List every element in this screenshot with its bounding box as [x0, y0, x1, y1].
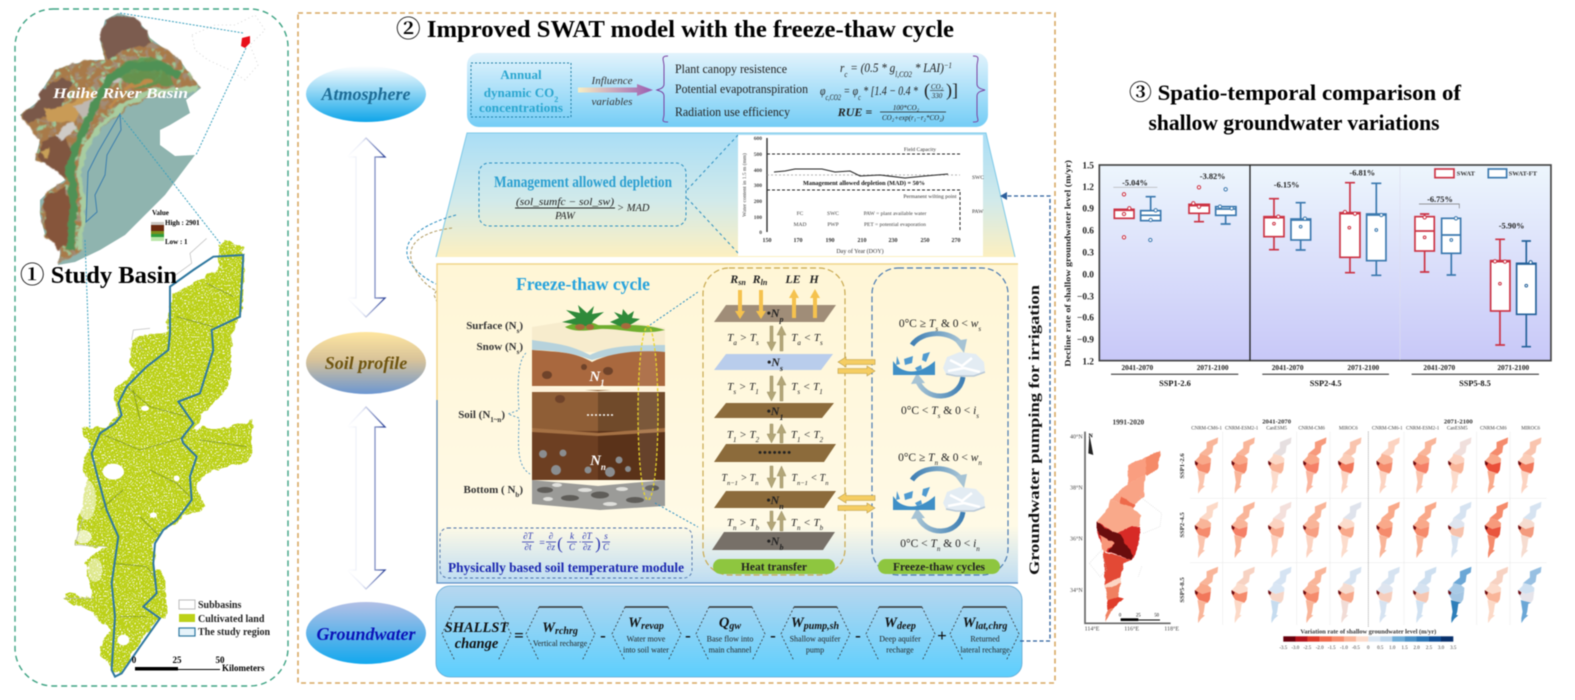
legend: elevation value: Value: [152, 209, 169, 217]
map: China inset: [192, 15, 265, 80]
header: periods and models: CNRM-CM6-1: [1191, 426, 1223, 431]
hexagon: W lateral: [950, 607, 1019, 661]
axis: periods and scenarios: 2041-2070: [1121, 363, 1154, 372]
diagram: soil column: Nn: [589, 453, 606, 472]
legend: colour bar: [1279, 628, 1457, 651]
box: annual dynamic CO2: concentrations: [479, 100, 563, 115]
legend: colour bar: 0: [1367, 646, 1370, 651]
layer: snow node: •Ns: [767, 355, 783, 372]
hexagon: W revap: into soil water: [623, 646, 669, 654]
box: MAD formula: (sol_sumfc − sol_sw): [516, 197, 615, 208]
chart: decline rate box plots: [1063, 160, 1551, 388]
axis: periods and scenarios: [1111, 363, 1539, 388]
panel: spatio-temporal comparison: [1063, 80, 1551, 651]
hexagon: Q gw: Qgw: [719, 615, 741, 632]
layer: soil node n: •Nn: [766, 493, 784, 510]
axis: periods and scenarios: SSP1-2.6: [1159, 379, 1191, 388]
scale bar: 50: [216, 655, 225, 665]
node: Atmosphere: [306, 66, 426, 122]
brace: right: [973, 56, 985, 122]
axis: periods and scenarios: SSP2-4.5: [1310, 379, 1341, 388]
layer: snow node: [714, 354, 833, 372]
legend: elevation value: High : 2901: [165, 219, 200, 227]
panel: management allowed depletion: [436, 133, 1015, 257]
arrows and temperature relations: Ts < T1: [791, 381, 823, 396]
chart: soil water depletion: Permanent wilting point: [903, 194, 957, 200]
chart: soil water depletion: PET = potential evaporation: [864, 222, 926, 228]
chart: soil water depletion: Field Capacity: [904, 147, 936, 153]
legend: colour bar: 1.0: [1389, 646, 1396, 651]
hexagon: Q gw: main channel: [709, 646, 752, 654]
labels: percent change: -5.90%: [1499, 222, 1524, 231]
formula: heat equation: ∂t: [525, 542, 532, 552]
layer: bottom node: •Nb: [767, 534, 783, 552]
arrow: influence variables: [578, 75, 653, 108]
axis: periods and scenarios: 2071-2100: [1497, 363, 1529, 372]
formula: heat equation: [522, 531, 610, 553]
legend: colour bar: 1.5: [1402, 646, 1408, 651]
heading: spatio-temporal comparison: ③ Spatio-temporal comparison of: [1129, 80, 1462, 105]
formula: heat equation: ∂T: [582, 531, 593, 541]
text: influence variables list: Plant canopy resistence: [675, 61, 787, 76]
charts: decline rate maps: [1070, 418, 1547, 651]
boxes: SSP5-8.5: [1415, 214, 1536, 347]
labels: scenarios: [1179, 453, 1186, 603]
chart: soil water depletion: PAW = plant available water: [864, 211, 927, 217]
hexagon: W pump sh: Shallow aquifer: [790, 634, 841, 644]
hexagon: W lateral: Wlat,chrg: [963, 615, 1007, 632]
panel: freeze-thaw cycles: [872, 268, 1008, 575]
arrow: groundwater pumping for irrigation: [1000, 192, 1050, 641]
formula: canopy resistance: rc = (0.5 * gl,CO2 * LAI)−1: [840, 60, 952, 78]
chart: soil water depletion: 230: [888, 238, 898, 244]
box: annual dynamic CO2: Annual: [500, 67, 542, 82]
map: 1991-2020 decline rate: 40°N: [1070, 434, 1083, 441]
hexagon: W lateral: lateral recharge: [960, 646, 1010, 654]
arrow: influence variables: Influence: [591, 75, 633, 87]
node: Soil profile: Soil profile: [325, 353, 407, 373]
diagram: soil column: N1: [588, 369, 605, 388]
label: Heat transfer: Heat transfer: [741, 562, 807, 574]
heading: spatio-temporal comparison: [1129, 80, 1462, 135]
labels: scenarios: SSP1-2.6: [1179, 453, 1186, 479]
chart: soil water depletion: 200: [754, 199, 762, 205]
hexagon: W deep: [866, 607, 935, 661]
arrows and temperature relations: Tn−1 > Tn: [721, 473, 759, 486]
boxes: SSP1-2.6: [1114, 186, 1236, 242]
layer: soil node 1: •N1: [767, 404, 783, 422]
labels: soil layers: Snow (Ns): [477, 341, 523, 356]
arrows: exchange between heat transfer and cycles (snow): [838, 357, 875, 376]
labels: soil layers: Bottom ( Nb): [463, 484, 523, 499]
hexagon: Q gw: Base flow into: [707, 634, 753, 644]
map: study region cultivated land: [63, 238, 253, 677]
box: annual dynamic CO2: [471, 63, 571, 117]
panel: study basin: [15, 9, 288, 686]
boxes: SSP2-4.5: [1264, 183, 1386, 275]
map: 1991-2020 decline rate: 1991-2020: [1112, 418, 1145, 427]
labels: percent change: -5.04%: [1122, 178, 1148, 187]
map: 1991-2020 decline rate: N: [1088, 433, 1093, 439]
hexagon: W rchrg: [526, 607, 595, 661]
formula: radiation use efficiency: RUE =: [837, 105, 872, 119]
chart: soil water depletion: FC: [797, 211, 804, 217]
box: soil temperature module: Physically based soil temperature module: [448, 561, 684, 576]
chart: soil water depletion: 210: [858, 238, 866, 244]
chart: soil water depletion: [738, 135, 984, 256]
header: periods and models: CNRM-CM6: [1298, 426, 1325, 431]
node: Groundwater: [306, 602, 426, 664]
header: periods and models: 2071-2100: [1444, 418, 1473, 425]
heading: Study Basin: ① Study Basin: [20, 262, 177, 289]
text: snow thaw condition: 0°C < Ts & 0 < is: [901, 405, 979, 420]
legend: SWAT and SWAT-FT: SWAT: [1457, 170, 1476, 177]
chart: soil water depletion: MAD: [794, 222, 806, 228]
map: 1991-2020 decline rate: 118°E: [1164, 626, 1179, 633]
axis: y ticks: 1.5: [1082, 161, 1094, 171]
label: Freeze-thaw cycles: [878, 559, 1000, 574]
legend: land categories: The study region: [198, 627, 270, 638]
label: Freeze-thaw cycles: Freeze-thaw cycles: [893, 562, 986, 574]
panel: heat transfer: [703, 268, 845, 575]
icon: soil water and ice cycle: [893, 469, 985, 531]
arrow: atmosphere to soil: [347, 138, 385, 317]
arrows and temperature relations: T1 > T2: [727, 429, 760, 444]
formula: heat equation: C: [603, 542, 610, 552]
diagram: soil column: [532, 305, 665, 510]
axis: y ticks: −0.6: [1077, 314, 1094, 324]
arrows: surface fluxes: [735, 289, 820, 319]
scale bar: 25: [172, 655, 182, 665]
arrow: influence variables: variables: [592, 96, 632, 108]
arrows and temperature relations: Tn > Tb: [727, 517, 760, 532]
arrows and temperature relations: Ta > Ts: [727, 332, 759, 347]
text: influence variables list: [675, 61, 808, 119]
map: 1991-2020 decline rate: 0: [1119, 614, 1122, 619]
formula: heat equation: ): [595, 534, 601, 553]
hexagon: W pump sh: [781, 607, 850, 661]
scale bar: 0: [132, 655, 137, 665]
chart: soil water depletion: Day of Year (DOY): [836, 248, 884, 255]
labels: surface fluxes: H: [808, 272, 819, 286]
chart: soil water depletion: 100: [754, 215, 762, 221]
axis: y ticks: 1.2: [1082, 357, 1094, 367]
formula: potential evapotranspiration: CO₂: [931, 83, 944, 91]
labels: surface fluxes: Rsn: [729, 272, 746, 287]
header: periods and models: CNRM-CM6: [1480, 426, 1507, 431]
map: 1991-2020 decline rate: 114°E: [1085, 626, 1100, 633]
labels: soil layers: [458, 320, 530, 499]
legend: SWAT and SWAT-FT: [1435, 169, 1538, 178]
box: soil temperature module: [440, 528, 692, 578]
formula: heat equation: ∂z: [547, 542, 555, 552]
scale bar: Kilometers: [222, 663, 265, 673]
arrows and temperature relations: Tn−1 < Tn: [791, 473, 829, 486]
icon: snow water and ice cycle: [893, 334, 985, 396]
small maps: SSP2-4.5: [1195, 502, 1541, 558]
hexagon: W deep: Wdeep: [884, 615, 916, 632]
arrow: soil to groundwater: [347, 407, 385, 589]
legend: SWAT and SWAT-FT: SWAT-FT: [1509, 170, 1538, 177]
node: Atmosphere: Atmosphere: [320, 84, 411, 104]
formula: potential evapotranspiration: 330: [931, 92, 943, 100]
box: MAD formula: PAW: [554, 211, 576, 222]
formula: heat equation: C: [569, 542, 576, 552]
formula: potential evapotranspiration: )]: [946, 80, 958, 101]
labels: scenarios: SSP5-8.5: [1179, 577, 1186, 603]
panel: groundwater balance: [436, 586, 1022, 677]
heading: improved SWAT model: ② Improved SWAT model with the freeze-thaw cycle: [396, 16, 954, 43]
text: influence variables list: Potential evapotranspiration: [675, 81, 808, 96]
hexagon: W pump sh: Wpump,sh: [791, 615, 840, 632]
hexagon: W rchrg: Wrchrg: [542, 620, 578, 637]
labels: percent change: -6.75%: [1427, 195, 1453, 204]
box: MAD formula: > MAD: [617, 203, 650, 214]
labels: percent change: [1113, 168, 1524, 231]
axis: y ticks: 0.6: [1082, 226, 1094, 236]
hexagon: W revap: Wrevap: [628, 615, 664, 632]
hexagon: SHALLST change: [442, 607, 511, 661]
box: MAD formula: [479, 163, 686, 226]
axis: y ticks: 0.3: [1082, 248, 1094, 258]
arrow: groundwater pumping for irrigation: Groundwater pumping for irrigation: [1027, 285, 1043, 575]
operators: -: [600, 626, 606, 645]
axis: periods and scenarios: 2041-2070: [1272, 363, 1304, 372]
operators: -: [855, 626, 861, 645]
legend: colour bar: 0.5: [1377, 646, 1384, 651]
hexagon: SHALLST change: SHALLST: [445, 620, 509, 636]
formula: heat equation: ∂: [549, 531, 553, 541]
node: Groundwater: Groundwater: [316, 624, 417, 644]
chart: soil water depletion: 0: [759, 230, 762, 236]
box: MAD formula: Management allowed depletion: [494, 174, 672, 191]
header: periods and models: MIROC6: [1521, 426, 1541, 431]
text: soil freeze condition: 0°C ≥ Tn & 0 < wn: [898, 452, 982, 467]
layer: intermediate nodes: [714, 444, 836, 462]
map: 1991-2020 decline rate: 36°N: [1070, 535, 1083, 542]
labels: surface fluxes: LE: [784, 272, 801, 286]
formula: heat equation: ∂T: [523, 531, 534, 541]
hexagon: W revap: Water move: [627, 634, 666, 644]
legend: land categories: [179, 600, 270, 638]
formula: heat equation: ∂z: [583, 542, 591, 552]
heading: spatio-temporal comparison: shallow groundwater variations: [1148, 110, 1440, 135]
chart: soil water depletion: PWP: [827, 222, 839, 228]
formula: radiation use efficiency: CO₂+exp(r₁−r₂*CO₂): [882, 114, 945, 122]
scale bar: [132, 655, 265, 673]
header: periods and models: 2041-2070: [1262, 418, 1292, 425]
small maps: SSP1-2.6: [1195, 437, 1541, 494]
arrow: dashed curves linking MAD and freeze-thaw: [407, 215, 456, 304]
labels: surface fluxes: [729, 272, 819, 287]
labels: surface fluxes: Rln: [752, 272, 768, 287]
operators: +: [937, 626, 947, 645]
legend: colour bar: -1.5: [1328, 646, 1336, 651]
text: snow freeze condition: 0°C ≥ Ts & 0 < ws: [899, 318, 981, 333]
axis: periods and scenarios: 2071-2100: [1197, 363, 1229, 372]
chart: soil water depletion: 270: [952, 238, 960, 244]
chart: soil water depletion: SWC: [827, 211, 839, 217]
layer: intermediate nodes: •••••••: [758, 447, 792, 459]
axis: periods and scenarios: 2071-2100: [1347, 363, 1380, 372]
hexagon: W lateral: Returned: [970, 634, 1000, 644]
callout: zoom lines from China inset to the basin: [85, 13, 246, 455]
heading: Freeze-thaw cycle: Freeze-thaw cycle: [516, 274, 650, 294]
layer: surface node: [714, 305, 836, 324]
chart: soil water depletion: Water content in 1.5 m (mm): [741, 153, 748, 217]
callout: lines to soil water chart: [687, 135, 738, 253]
axis: periods and scenarios: SSP5-8.5: [1459, 379, 1491, 388]
map: 1991-2020 decline rate: 116°E: [1124, 626, 1139, 633]
box: annual dynamic CO2: dynamic CO2: [484, 85, 558, 104]
layer: bottom node: [712, 532, 835, 552]
labels: percent change: -6.15%: [1274, 180, 1299, 189]
hexagon: W pump sh: pump: [806, 646, 824, 654]
header: periods and models: MIROC6: [1339, 426, 1358, 431]
hexagon: W rchrg: Vertical recharge: [533, 639, 588, 648]
legend: colour bar: -1.0: [1340, 646, 1348, 651]
legend: colour bar: -3.5: [1279, 646, 1288, 651]
chart: soil water depletion: 400: [754, 168, 762, 174]
label: Heat transfer: [713, 559, 835, 574]
panel: atmosphere CO2: [467, 53, 988, 127]
panel: freeze-thaw cycle: [437, 264, 1018, 583]
hexagon: SHALLST change: change: [455, 636, 499, 652]
formula: potential evapotranspiration: (: [924, 80, 930, 101]
layer: soil node 1: [714, 403, 834, 422]
legend: land categories: Subbasins: [198, 600, 241, 611]
small maps: SSP5-8.5: [1195, 567, 1541, 623]
formula: heat equation: s: [604, 531, 608, 541]
operators: [514, 626, 947, 645]
axis: y ticks: −0.9: [1077, 335, 1094, 345]
panel: improved SWAT model: [298, 13, 1551, 683]
legend: elevation value: Low : 1: [165, 238, 188, 246]
text: influence variables list: Radiation use efficiency: [675, 104, 790, 119]
chart: soil water depletion: 250: [920, 238, 930, 244]
labels: scenarios: SSP2-4.5: [1179, 512, 1186, 538]
formula: heat equation: =: [539, 538, 545, 549]
legend: colour bar: 2.5: [1426, 646, 1433, 651]
arrows and temperature relations: [721, 326, 829, 532]
formula: heat equation: ·: [579, 537, 581, 547]
axis: y ticks: [1077, 161, 1094, 367]
legend: colour bar: Variation rate of shallow groundwater level (m/yr): [1300, 628, 1436, 635]
hexagon: W revap: [612, 607, 681, 661]
hexagon: W deep: Deep aquifer: [879, 634, 921, 644]
brace: left: [657, 56, 668, 122]
labels: soil layers: Surface (Ns): [466, 320, 523, 335]
labels: percent change: -6.81%: [1349, 168, 1375, 177]
map: 1991-2020 decline rate: 34°N: [1070, 587, 1083, 594]
axis: y ticks: 0.0: [1082, 270, 1094, 280]
labels: soil layers: Soil (N1~n): [458, 409, 505, 424]
text: Haihe River Basin: Haihe River Basin: [52, 86, 188, 102]
legend: colour bar: -0.5: [1352, 646, 1360, 651]
arrows and temperature relations: T1 < T2: [791, 429, 824, 444]
chart: soil water depletion: PAW: [972, 209, 984, 215]
axis: y ticks: 0.9: [1082, 205, 1094, 215]
map: 1991-2020 decline rate: 50: [1154, 614, 1160, 619]
legend: land categories: Cultivated land: [198, 614, 265, 625]
formula: heat equation: k: [570, 531, 575, 541]
arrows and temperature relations: Ta < Ts: [791, 332, 823, 347]
arrows and temperature relations: Tn < Tb: [791, 517, 824, 532]
layer: surface node: •Np: [767, 306, 783, 324]
chart: soil water depletion: Management allowed depletion (MAD) = 50%: [803, 180, 925, 187]
chart: soil water depletion: 300: [754, 183, 762, 189]
formula: potential evapotranspiration: φc,CO2 = φc * [1.4 − 0.4 *: [820, 83, 918, 102]
formula: radiation use efficiency: [837, 104, 946, 122]
axis: y title: Decline rate of shallow groundwater level (m/yr): [1063, 160, 1073, 367]
axis: y ticks: −0.3: [1077, 292, 1094, 302]
map: 1991-2020 decline rate: 38°N: [1070, 484, 1083, 491]
operators: =: [514, 626, 524, 645]
header: periods and models: [1191, 418, 1541, 431]
header: periods and models: CNRM-CM6-1: [1372, 426, 1403, 431]
legend: elevation value: [151, 209, 200, 246]
chart: soil water depletion: 500: [754, 152, 762, 158]
legend: colour bar: 2.0: [1414, 646, 1420, 651]
map: 1991-2020 decline rate: [1070, 418, 1179, 633]
legend: colour bar: -2.5: [1303, 646, 1312, 651]
chart: soil water depletion: 150: [762, 238, 772, 244]
arrows: exchange between heat transfer and cycles (soil): [838, 493, 875, 513]
callout: lines to heat transfer: [650, 292, 698, 527]
node: Soil profile: [306, 332, 426, 394]
axis: periods and scenarios: 2041-2070: [1423, 363, 1456, 372]
chart: soil water depletion: 600: [754, 136, 762, 142]
legend: colour bar: 3.5: [1450, 646, 1457, 651]
legend: colour bar: 3.0: [1438, 646, 1445, 651]
header: periods and models: CNRM-ESM2-1: [1225, 426, 1259, 431]
formula: radiation use efficiency: 100*CO₂: [893, 104, 920, 112]
legend: colour bar: -3.0: [1291, 646, 1300, 651]
chart: soil water depletion: SWC: [972, 175, 984, 181]
header: periods and models: CNRM-ESM2-1: [1406, 426, 1440, 431]
layer: soil node n: [714, 491, 836, 510]
labels: percent change: -3.82%: [1200, 172, 1225, 181]
text: soil thaw condition: 0°C < Tn & 0 < in: [900, 538, 980, 553]
map: Haihe River Basin terrain: [20, 13, 201, 265]
operators: -: [685, 626, 691, 645]
map: 1991-2020 decline rate: 25: [1136, 614, 1141, 619]
operators: -: [770, 626, 776, 645]
header: periods and models: CanESM5: [1447, 426, 1468, 431]
chart: soil water depletion: 190: [826, 238, 834, 244]
chart: soil water depletion: 170: [794, 238, 802, 244]
hexagon: Q gw: [696, 607, 765, 661]
header: periods and models: CanESM5: [1266, 426, 1288, 431]
formula: heat equation: (: [557, 534, 563, 553]
legend: colour bar: -2.0: [1316, 646, 1324, 651]
arrows and temperature relations: Ts > T1: [727, 381, 759, 396]
axis: y ticks: 1.2: [1082, 183, 1094, 193]
hexagon: W deep: recharge: [886, 646, 914, 654]
